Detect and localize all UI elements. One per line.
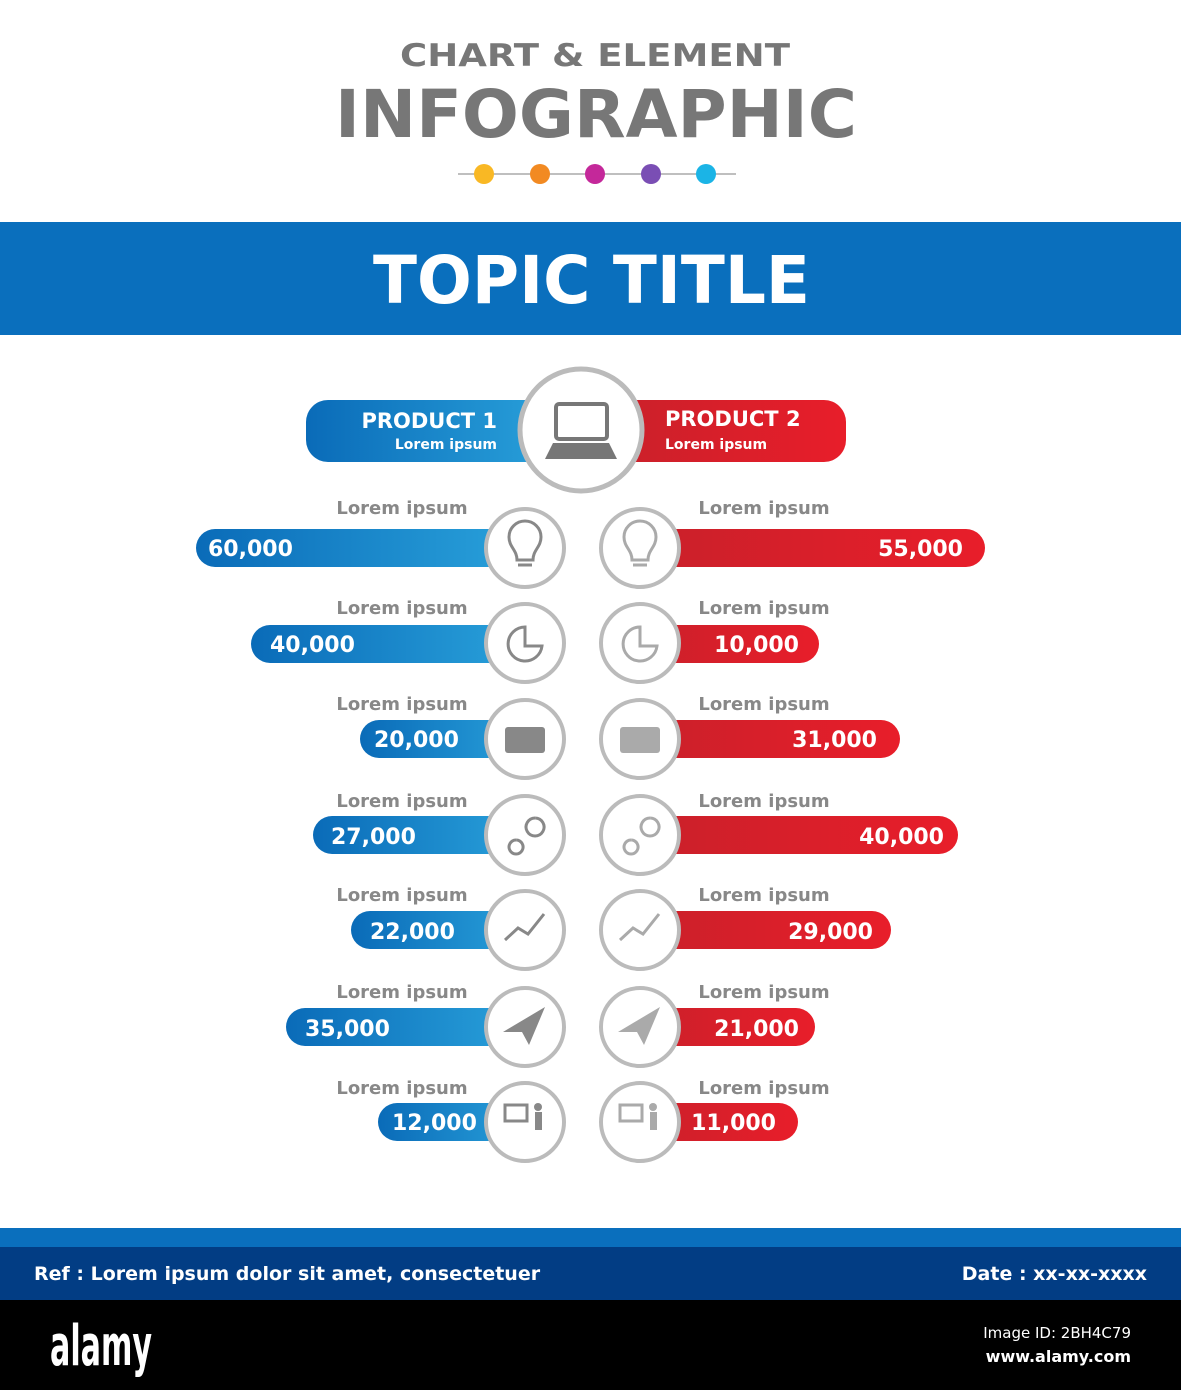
- rows: Lorem ipsum: [336, 598, 468, 619]
- rows: 40,000: [270, 633, 355, 658]
- rows: Lorem ipsum: [336, 982, 468, 1003]
- rows: 12,000: [392, 1111, 477, 1136]
- rows: 21,000: [714, 1017, 799, 1042]
- rows: Lorem ipsum: [698, 694, 830, 715]
- title: INFOGRAPHIC: [335, 76, 857, 153]
- footer: Date : xx-xx-xxxx: [962, 1263, 1147, 1285]
- rows: 29,000: [788, 920, 873, 945]
- rows: Lorem ipsum: [698, 598, 830, 619]
- watermark bar: [0, 1300, 1181, 1390]
- rows: Lorem ipsum: [698, 982, 830, 1003]
- rows: Lorem ipsum: [698, 1078, 830, 1099]
- product header: PRODUCT 2: [665, 407, 801, 431]
- rows: 10,000: [714, 633, 799, 658]
- watermark bar: www.alamy.com: [986, 1347, 1131, 1366]
- rows: Lorem ipsum: [698, 885, 830, 906]
- product header: Lorem ipsum: [395, 437, 497, 453]
- product header: Lorem ipsum: [665, 437, 767, 453]
- rows: Lorem ipsum: [336, 885, 468, 906]
- watermark bar: Image ID: 2BH4C79: [983, 1324, 1131, 1342]
- rows: 40,000: [859, 825, 944, 850]
- rows: Lorem ipsum: [336, 694, 468, 715]
- rows: 22,000: [370, 920, 455, 945]
- rows: 60,000: [208, 537, 293, 562]
- product header: PRODUCT 1: [361, 409, 497, 433]
- rows: Lorem ipsum: [698, 498, 830, 519]
- title: CHART & ELEMENT: [400, 38, 790, 74]
- product header: [306, 369, 846, 491]
- dots decoration: [458, 164, 736, 184]
- rows: 20,000: [374, 728, 459, 753]
- rows: Lorem ipsum: [336, 498, 468, 519]
- topic banner: [0, 222, 1181, 335]
- rows: Lorem ipsum: [336, 1078, 468, 1099]
- rows: Lorem ipsum: [336, 791, 468, 812]
- rows: 55,000: [878, 537, 963, 562]
- footer: Ref : Lorem ipsum dolor sit amet, consectetuer: [34, 1263, 541, 1285]
- rows: 31,000: [792, 728, 877, 753]
- rows: [196, 498, 985, 1161]
- rows: 35,000: [305, 1017, 390, 1042]
- title: [335, 38, 857, 153]
- rows: Lorem ipsum: [698, 791, 830, 812]
- watermark bar: alamy: [50, 1314, 152, 1379]
- icons: [505, 521, 659, 1121]
- topic banner: TOPIC TITLE: [373, 242, 810, 319]
- footer: [0, 1228, 1181, 1300]
- rows: 11,000: [691, 1111, 776, 1136]
- rows: 27,000: [331, 825, 416, 850]
